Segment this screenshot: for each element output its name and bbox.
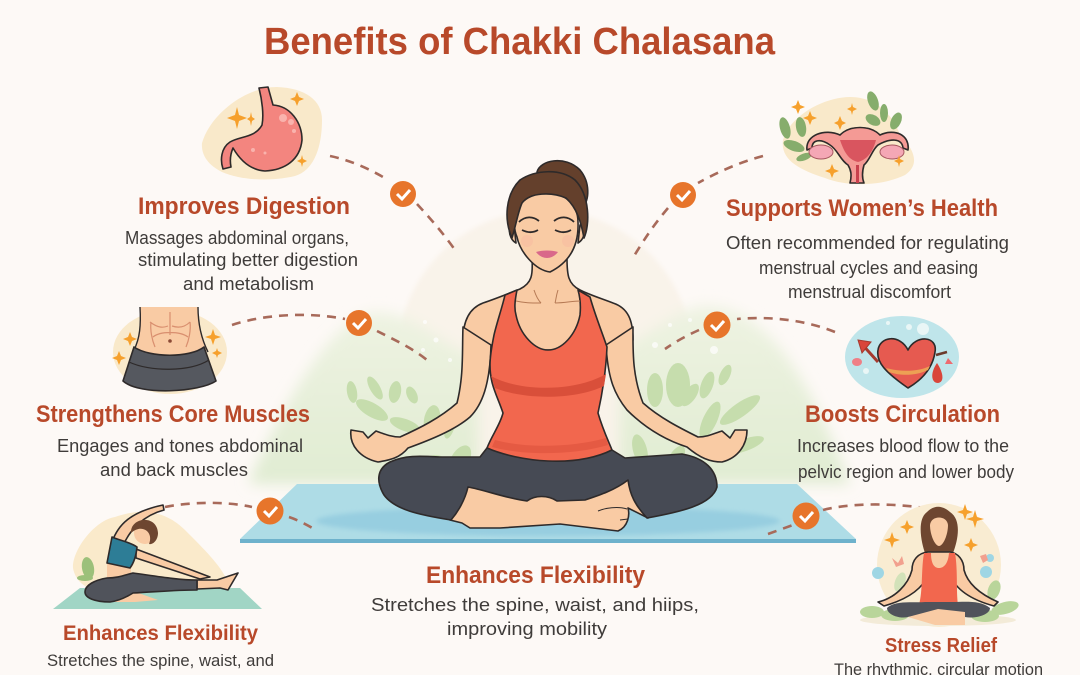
text: flexibility left description: Stretches the spine, waist, and — [47, 651, 274, 670]
central illustration background — [250, 210, 850, 506]
illustration: seated meditation — [860, 503, 1020, 627]
text: digestion description: Massages abdominal organs, — [125, 228, 349, 248]
heading: improves digestion: Improves Digestion — [138, 193, 350, 220]
heading: enhances flexibility left: Enhances Flexibility — [63, 621, 258, 645]
illustration: side stretch pose — [53, 505, 262, 609]
leggings — [379, 448, 717, 520]
connector: core — [232, 310, 427, 360]
text: core description: and back muscles — [100, 460, 248, 480]
check badge — [670, 182, 696, 208]
tucked shin — [112, 590, 158, 602]
text: digestion description — [125, 228, 358, 294]
text: circulation description — [797, 436, 1014, 482]
left arm — [351, 327, 491, 462]
text: women's health description: Often recommended for regulating — [726, 233, 1009, 253]
text: flexibility centre description: improving mobility — [447, 619, 607, 639]
text: women's health description: menstrual discomfort — [788, 282, 951, 302]
text: core description: Engages and tones abdominal — [57, 436, 303, 456]
text: circulation description: Increases blood flow to the — [797, 436, 1009, 456]
heading: stress relief: Stress Relief — [885, 635, 997, 657]
tank top — [487, 290, 612, 465]
text: digestion description: stimulating better digestion — [138, 250, 358, 270]
raised arm — [112, 505, 164, 548]
text: flexibility centre description — [371, 595, 699, 639]
connector: small flexibility — [165, 498, 316, 530]
yoga mat — [240, 484, 856, 543]
connector: stress relief — [768, 502, 925, 534]
text: circulation description: pelvic region and lower body — [798, 462, 1014, 482]
right arm — [606, 327, 747, 462]
icon: abdomen — [112, 307, 227, 394]
icon: heart — [845, 316, 959, 398]
connector: women's health — [634, 156, 763, 256]
check badge — [704, 312, 730, 338]
face — [515, 193, 578, 272]
title: Benefits of Chakki Chalasana — [264, 21, 776, 63]
connector: circulation — [665, 312, 835, 349]
heading: enhances flexibility centre: Enhances Flexibility — [426, 562, 646, 589]
ears — [509, 225, 585, 243]
connector: digestion — [330, 156, 455, 250]
woman in lotus pose — [351, 161, 747, 531]
check badge — [256, 498, 284, 524]
text: women's health description: menstrual cycles and easing — [759, 258, 978, 278]
text: women's health description — [726, 233, 1009, 302]
eyes and mouth — [519, 217, 574, 232]
neck and chest — [463, 258, 633, 350]
heading: boosts circulation: Boosts Circulation — [805, 401, 1000, 428]
check badge — [390, 181, 416, 207]
check badge — [792, 502, 820, 530]
hair — [507, 172, 588, 238]
foot — [197, 573, 238, 590]
head — [134, 522, 156, 544]
text: flexibility centre description: Stretches the spine, waist, and hiips, — [371, 595, 699, 615]
foot toes — [598, 508, 628, 520]
heading: supports women's health: Supports Women’s Health — [726, 195, 998, 222]
heading: strengthens core muscles: Strengthens Core Muscles — [36, 401, 310, 428]
midriff — [107, 562, 131, 580]
icon: stomach — [202, 87, 322, 179]
text: digestion description: and metabolism — [183, 274, 314, 294]
icon: uterus — [777, 90, 914, 184]
hair bun — [537, 161, 588, 208]
check badge — [346, 310, 372, 336]
top — [107, 537, 137, 568]
crossed legs skin — [450, 480, 648, 531]
lower arm — [136, 549, 210, 579]
collar lines — [516, 290, 580, 303]
leggings — [85, 573, 197, 602]
text: core description — [57, 436, 303, 480]
